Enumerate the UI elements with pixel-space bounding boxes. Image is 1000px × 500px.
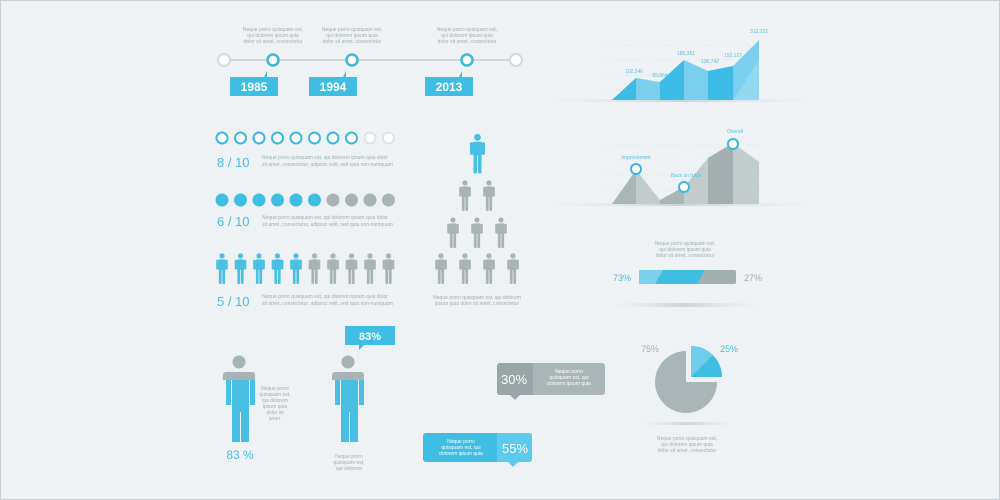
big person 83 %: quisquam est, xyxy=(259,392,291,398)
rating: 8/10 circles xyxy=(216,132,394,170)
progress bar 73/27: Neque porro quisquam est, xyxy=(655,241,715,247)
rating: 8/10 circles: sit amet, consectetur, adipisci velit, sed quia non-numquam xyxy=(262,162,393,168)
big person 83 %: ipsum quia xyxy=(263,404,287,410)
callout 55% xyxy=(423,433,532,467)
pie chart 75/25 xyxy=(640,344,738,454)
callout 55%: quisquam est, qui xyxy=(441,445,481,451)
people pyramid: Neque porro quisquam est, qui dolorem xyxy=(433,295,521,301)
rating: 5/10 people: sit amet, consectetur, adipisci velit, sed quia non-numquam xyxy=(262,301,393,307)
big person 83 %: amet. xyxy=(269,416,281,422)
pie chart 75/25: dolor sit amet, consectetur xyxy=(658,448,717,454)
progress bar 73/27: 27% xyxy=(744,273,762,283)
chart: blue area: 102,546 xyxy=(625,69,643,75)
person with 83% callout: Neque porro xyxy=(335,454,363,460)
year labels xyxy=(230,71,473,96)
rating: 6/10 dots: Neque porro quisquam est, qui dolorem ipsum quia dolor xyxy=(262,215,388,221)
chart: blue area: 152,127 xyxy=(724,53,742,59)
chart: gray area with milestones xyxy=(545,129,815,206)
big person 83 %: dolor sit xyxy=(266,410,284,416)
chart: blue area: 312,332 xyxy=(750,29,768,35)
year labels: 1994 xyxy=(320,80,347,94)
timeline texts: qui dolorem ipsum quia xyxy=(441,33,493,39)
timeline texts: dolor sit amet, consectetur xyxy=(323,39,382,45)
timeline texts: dolor sit amet, consectetur xyxy=(244,39,303,45)
progress bar 73/27: dolor sit amet, consectetur xyxy=(656,253,715,259)
timeline texts: dolor sit amet, consectetur xyxy=(438,39,497,45)
big person 83 %: 83 % xyxy=(226,448,254,462)
chart: blue area: 185,351 xyxy=(677,51,695,57)
callout 30%: dolorem ipsum quia xyxy=(547,381,591,387)
timeline xyxy=(218,27,522,96)
callout 30%: 30% xyxy=(501,372,527,387)
people pyramid xyxy=(433,134,521,307)
pie chart 75/25: 75% xyxy=(641,344,659,354)
year labels: 2013 xyxy=(436,80,463,94)
person with 83% callout: 83% xyxy=(359,331,381,343)
chart: gray area with milestones: Improvement xyxy=(621,155,651,161)
timeline texts: Neque porro quisquam est, xyxy=(243,27,303,33)
person with 83% callout xyxy=(332,326,395,472)
pie chart 75/25: 25% xyxy=(720,344,738,354)
callout 55%: dolorem ipsum quia xyxy=(439,451,483,457)
callout 30%: Neque porro xyxy=(555,369,583,375)
person with 83% callout: quisquam est, xyxy=(333,460,365,466)
chart: gray area with milestones: Back on track xyxy=(671,173,702,179)
rating: 6/10 dots: sit amet, consectetur, adipisci velit, sed quia non-numquam xyxy=(262,222,393,228)
chart: gray area with milestones: Overall xyxy=(727,129,743,135)
chart: blue area: 89,864 xyxy=(652,73,668,79)
people pyramid: ipsum quia dolor sit amet, consectetur xyxy=(435,301,519,307)
person with 83% callout: qui dolorem xyxy=(336,466,362,472)
big person 83 %: qui dolorem xyxy=(262,398,288,404)
rating: 5/10 people: 5 / 10 xyxy=(217,294,250,309)
big person 83 % xyxy=(223,356,291,462)
timeline texts xyxy=(243,27,497,45)
rating: 8/10 circles: 8 / 10 xyxy=(217,155,250,170)
chart: blue area: 136,742 xyxy=(701,59,719,65)
rating: 6/10 dots xyxy=(216,194,395,229)
callout 30% xyxy=(497,363,605,400)
progress bar 73/27: 73% xyxy=(613,273,631,283)
rating: 5/10 people: Neque porro quisquam est, qui dolorem ipsum quia dolor xyxy=(262,294,388,300)
pie chart 75/25: qui dolorem ipsum quia xyxy=(661,442,713,448)
timeline texts: qui dolorem ipsum quia xyxy=(326,33,378,39)
year labels: 1985 xyxy=(241,80,268,94)
progress bar 73/27 xyxy=(610,241,762,307)
rating: 5/10 people xyxy=(216,253,394,309)
timeline texts: Neque porro quisquam est, xyxy=(437,27,497,33)
callout 55%: 55% xyxy=(502,441,528,456)
rating: 6/10 dots: 6 / 10 xyxy=(217,214,250,229)
chart: blue area xyxy=(545,29,815,102)
progress bar 73/27: qui dolorem ipsum quia xyxy=(659,247,711,253)
callout 30%: quisquam est, qui xyxy=(549,375,589,381)
timeline texts: Neque porro quisquam est, xyxy=(322,27,382,33)
rating: 8/10 circles: Neque porro quisquam est, qui dolorem ipsum quia dolor xyxy=(262,155,388,161)
callout 55%: Neque porro xyxy=(447,439,475,445)
big person 83 %: Neque porro xyxy=(261,386,289,392)
pie chart 75/25: Neque porro quisquam est, xyxy=(657,436,717,442)
timeline texts: qui dolorem ipsum quia xyxy=(247,33,299,39)
